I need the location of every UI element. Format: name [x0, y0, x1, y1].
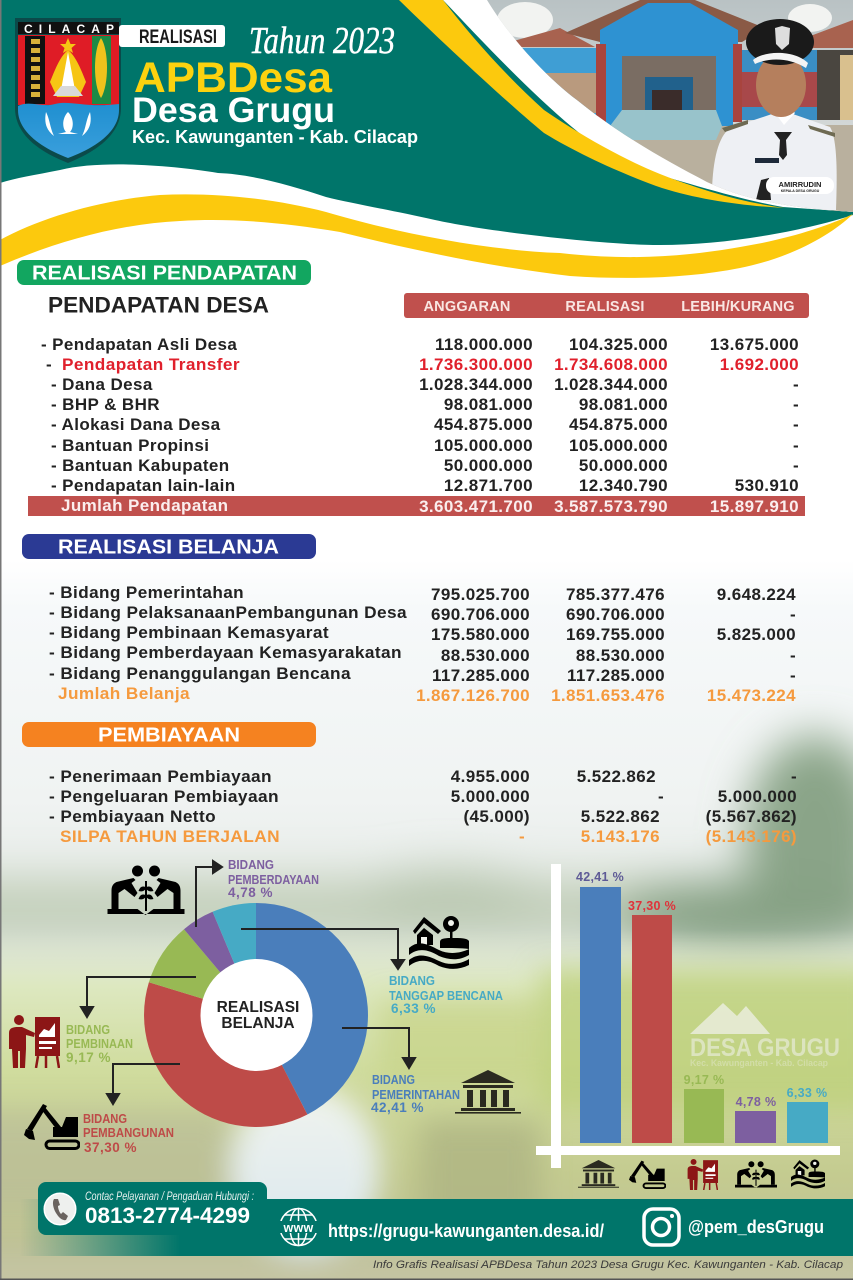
footer: website: https://grugu-kawunganten.desa.id/ — [328, 1221, 604, 1241]
arrow: tanggap bencana — [241, 929, 404, 969]
rows: pendapatan: 12.871.700 — [444, 476, 533, 495]
section pill: pembiayaan — [22, 722, 316, 747]
label: bidang pembinaan — [66, 1022, 133, 1065]
arrow: pembinaan — [81, 977, 196, 1017]
rows: pendapatan: - BHP & BHR — [51, 395, 160, 414]
rows: pembiayaan: - Pembiayaan Netto — [49, 807, 216, 826]
label: bidang tanggap bencana — [389, 973, 504, 1016]
total row: jumlah pendapatan — [28, 496, 805, 516]
label: bidang pemberdayaan: 4,78 % — [228, 885, 273, 900]
rows: pembiayaan: (5.567.862) — [706, 807, 797, 826]
label: bidang tanggap bencana: 6,33 % — [391, 1001, 436, 1016]
rows: pendapatan: - — [793, 456, 799, 475]
logo: Cilacap shield: CILACAP — [24, 22, 114, 36]
rows: belanja: 117.285.000 — [432, 666, 530, 685]
rows: pembiayaan: (5.143.176) — [706, 827, 797, 846]
total row: jumlah pendapatan: 3.603.471.700 — [419, 497, 533, 516]
total row: jumlah pendapatan: 15.897.910 — [710, 497, 799, 516]
rows: belanja: - Bidang PelaksanaanPembangunan Desa — [49, 603, 407, 622]
rows: belanja: - Bidang Pemberdayaan Kemasyarakatan — [49, 643, 402, 662]
table header bar — [404, 293, 809, 318]
bar: pemberdayaan: 4,78 % — [736, 1095, 776, 1109]
label: REALISASI — [119, 25, 225, 48]
photo: entrance — [622, 56, 716, 110]
subheading: location: Kec. Kawunganten - Kab. Cilacap — [132, 127, 418, 147]
footer: teal band — [20, 1199, 853, 1256]
rows: pendapatan: 1.736.300.000 — [419, 355, 533, 374]
rows: belanja: 5.825.000 — [717, 625, 796, 644]
rows: pembiayaan: SILPA TAHUN BERJALAN — [60, 827, 280, 846]
panel: realisasi belanja — [22, 534, 796, 705]
total row: jumlah pendapatan: Jumlah Pendapatan — [61, 496, 228, 515]
label: bidang pemerintahan: PEMERINTAHAN — [372, 1087, 460, 1102]
bar: pembinaan: 9,17 % — [684, 1073, 724, 1087]
label: bidang tanggap bencana: TANGGAP BENCANA — [389, 988, 504, 1003]
bar: pembinaan — [684, 1073, 724, 1143]
name tag: AMIRRUDIN — [779, 180, 821, 189]
rows: pendapatan: 105.000.000 — [569, 436, 668, 455]
rows: belanja: - — [790, 646, 796, 665]
rows: pendapatan: - Bantuan Propinsi — [51, 436, 209, 455]
label: bidang pemberdayaan — [228, 857, 319, 900]
logo: paddy column — [95, 38, 107, 98]
name tag — [766, 177, 834, 194]
bar: pembangunan — [628, 899, 676, 1143]
label: bidang pemerintahan: BIDANG — [372, 1072, 415, 1087]
icon: people planting — [108, 866, 184, 915]
chart axes — [536, 864, 840, 1168]
rows: pendapatan: - Pendapatan lain-lain — [51, 476, 236, 495]
icon: instagram — [644, 1209, 679, 1245]
panel: pembiayaan — [22, 722, 797, 846]
rows: belanja: 795.025.700 — [431, 585, 530, 604]
bar: tanggap bencana: 6,33 % — [787, 1086, 827, 1100]
label: bidang pemerintahan — [371, 1072, 460, 1115]
rows: pendapatan: 1.028.344.000 — [554, 375, 668, 394]
rows: pembiayaan: - — [519, 827, 525, 846]
rows: pembiayaan: - Penerimaan Pembiayaan — [49, 767, 272, 786]
heading: APBDesa: APBDesa — [134, 54, 333, 102]
label: bidang pembangunan: PEMBANGUNAN — [83, 1125, 174, 1140]
photo: pillars — [596, 44, 606, 122]
bar: tanggap bencana — [787, 1086, 828, 1143]
rows: belanja — [49, 583, 796, 705]
rows: belanja: 88.530.000 — [576, 646, 665, 665]
axis icon: government building — [578, 1160, 619, 1188]
bar: pemerintahan: 42,41 % — [576, 870, 624, 884]
rows: pembiayaan: (45.000) — [463, 807, 530, 826]
icon: excavator — [24, 1104, 79, 1148]
rows: pendapatan: 1.028.344.000 — [419, 375, 533, 394]
icon: flood disaster — [409, 916, 469, 969]
watermark: Desa Grugu — [690, 1003, 840, 1068]
photo: gable — [565, 0, 765, 42]
rows: belanja: - — [790, 666, 796, 685]
footer: contact box: Contac Pelayanan / Pengaduan Hubungi : — [85, 1191, 254, 1203]
rows: pendapatan: 50.000.000 — [444, 456, 533, 475]
rows: belanja: 9.648.224 — [717, 585, 796, 604]
logo: yellow stars column — [31, 39, 40, 97]
icon: government building — [455, 1070, 521, 1114]
section pill: realisasi belanja: REALISASI BELANJA — [58, 536, 279, 558]
rows: belanja: - Bidang Pemerintahan — [49, 583, 244, 602]
footer caption: Info Grafis Realisasi APBDesa Tahun 2023 Desa Grugu Kec. Kawunganten - Kab. Cilacap — [373, 1259, 843, 1271]
photo: left wing — [510, 28, 595, 47]
rows: pendapatan: 118.000.000 — [435, 335, 533, 354]
rows: pembiayaan: 5.522.862 — [581, 807, 660, 826]
rows: pendapatan: 454.875.000 — [434, 415, 533, 434]
rows: pendapatan: 454.875.000 — [569, 415, 668, 434]
icon: www globe: www — [282, 1221, 314, 1235]
lower yellow wave — [0, 194, 853, 278]
header: yellow swoosh — [399, 0, 785, 208]
rows: pendapatan: - Bantuan Kabupaten — [51, 456, 230, 475]
rows: belanja: - — [790, 605, 796, 624]
label: bidang pembangunan: 37,30 % — [84, 1140, 137, 1155]
bar: pembangunan: 37,30 % — [628, 899, 676, 913]
rows: pembiayaan — [49, 767, 797, 846]
rows: belanja: 1.851.653.476 — [551, 686, 665, 705]
rows: belanja: 1.867.126.700 — [416, 686, 530, 705]
rows: belanja: 690.706.000 — [566, 605, 665, 624]
bar: pemerintahan — [576, 870, 624, 1143]
rows: pembiayaan: 5.522.862 — [577, 767, 656, 786]
section pill: realisasi belanja — [22, 534, 316, 559]
rows: pembiayaan: 5.000.000 — [451, 787, 530, 806]
rows: pendapatan: Pendapatan Transfer — [62, 355, 240, 374]
rows: belanja: 690.706.000 — [431, 605, 530, 624]
table header bar: ANGGARAN — [424, 299, 510, 315]
header: white swoosh left of photo — [399, 0, 853, 212]
table heading: pendapatan desa: PENDAPATAN DESA — [48, 292, 269, 318]
arrow: pemerintahan — [342, 1028, 415, 1068]
arrow: pemberdayaan — [196, 861, 222, 927]
label: bidang pembangunan: BIDANG — [83, 1111, 127, 1126]
label: bidang pembinaan: 9,17 % — [66, 1050, 111, 1065]
axis icon: flood disaster — [791, 1160, 825, 1188]
panel: realisasi pendapatan — [17, 260, 809, 516]
axis icon: excavator — [629, 1161, 665, 1188]
rows: pendapatan: - Pendapatan Asli Desa — [41, 335, 237, 354]
donut chart: realisasi belanja — [144, 903, 368, 1127]
rows: pendapatan: 104.325.000 — [569, 335, 668, 354]
rows: belanja: 117.285.000 — [567, 666, 665, 685]
rows: pendapatan: - Alokasi Dana Desa — [51, 415, 221, 434]
rows: belanja: 169.755.000 — [566, 625, 665, 644]
total row: jumlah pendapatan: 3.587.573.790 — [554, 497, 668, 516]
label: bidang pembinaan: BIDANG — [66, 1022, 110, 1037]
logo: blue sea base — [18, 103, 119, 158]
rows: pembiayaan: - — [658, 787, 664, 806]
heading: Tahun 2023: Tahun 2023 — [249, 20, 395, 62]
footer: instagram handle: @pem_desGrugu — [688, 1217, 824, 1237]
axis icon: presenter — [688, 1159, 718, 1190]
rows: pendapatan: - Dana Desa — [51, 375, 153, 394]
photo: yard — [600, 125, 853, 215]
rows: pendapatan: 530.910 — [735, 476, 799, 495]
donut chart: realisasi belanja: REALISASI — [217, 999, 299, 1016]
header: building photo with village head — [487, 0, 853, 215]
section pill: realisasi pendapatan: REALISASI PENDAPATAN — [32, 262, 297, 284]
rows: pendapatan: 1.734.608.000 — [554, 355, 668, 374]
table header bar: LEBIH/KURANG — [681, 299, 795, 315]
bar: pemberdayaan — [735, 1095, 776, 1143]
axis icon: people planting — [735, 1161, 777, 1188]
rows: pendapatan: 12.340.790 — [579, 476, 668, 495]
header: teal banner — [0, 0, 853, 245]
icon: phone — [43, 1192, 77, 1226]
label: bidang pembangunan — [83, 1111, 174, 1155]
rows: pendapatan: 98.081.000 — [579, 395, 668, 414]
label: REALISASI: REALISASI — [139, 27, 217, 48]
rows: pendapatan: - — [793, 415, 799, 434]
table header bar: REALISASI — [565, 299, 645, 315]
rows: pendapatan: 105.000.000 — [434, 436, 533, 455]
label: bidang pemerintahan: 42,41 % — [371, 1100, 424, 1115]
rows: pendapatan: 98.081.000 — [444, 395, 533, 414]
rows: pendapatan — [41, 335, 799, 495]
rows: pembiayaan: 4.955.000 — [451, 767, 530, 786]
photo: right building — [812, 20, 853, 48]
arrow: pembangunan — [107, 1064, 180, 1104]
rows: belanja: - Bidang Pembinaan Kemasyarat — [49, 623, 329, 642]
rows: belanja: 175.580.000 — [431, 625, 530, 644]
label: bidang pemberdayaan: BIDANG — [228, 857, 274, 872]
icon: www globe — [278, 1208, 319, 1246]
logo: Cilacap shield — [15, 18, 121, 163]
bar chart: realisasi belanja — [536, 864, 840, 1190]
heading: Desa Grugu: Desa Grugu — [132, 91, 335, 130]
label: bidang pemberdayaan: PEMBERDAYAAN — [228, 872, 319, 887]
rows: pendapatan: - — [46, 355, 52, 374]
rows: pendapatan: 50.000.000 — [579, 456, 668, 475]
icon: presenter — [9, 1015, 60, 1068]
rows: pendapatan: 13.675.000 — [710, 335, 799, 354]
rows: pembiayaan: - — [791, 767, 797, 786]
donut chart: realisasi belanja: BELANJA — [221, 1015, 295, 1032]
rows: pendapatan: 1.692.000 — [720, 355, 799, 374]
rows: pendapatan: - — [793, 436, 799, 455]
label: bidang pembinaan: PEMBINAAN — [66, 1036, 133, 1051]
section pill: pembiayaan: PEMBIAYAAN — [98, 724, 240, 746]
rows: belanja: 88.530.000 — [441, 646, 530, 665]
logo: star and flame monument — [60, 38, 76, 53]
rows: pembiayaan: - Pengeluaran Pembiayaan — [49, 787, 279, 806]
rows: pembiayaan: 5.143.176 — [581, 827, 660, 846]
rows: belanja: Jumlah Belanja — [58, 684, 190, 703]
rows: belanja: - Bidang Penanggulangan Bencana — [49, 664, 351, 683]
photo: person — [712, 113, 837, 210]
name tag: KEPALA DESA GRUGU — [781, 189, 820, 193]
footer: contact box — [38, 1182, 267, 1235]
rows: pendapatan: - — [793, 395, 799, 414]
label: bidang tanggap bencana: BIDANG — [389, 973, 435, 988]
rows: pembiayaan: 5.000.000 — [718, 787, 797, 806]
watermark: Desa Grugu: Kec. Kawunganten - Kab. Cilacap — [690, 1058, 828, 1068]
rows: belanja: 785.377.476 — [566, 585, 665, 604]
rows: pendapatan: - — [793, 375, 799, 394]
background: landscape photo fading into white — [0, 560, 853, 1280]
rows: belanja: 15.473.224 — [707, 686, 796, 705]
footer: contact box: 0813-2774-4299 — [85, 1203, 250, 1228]
